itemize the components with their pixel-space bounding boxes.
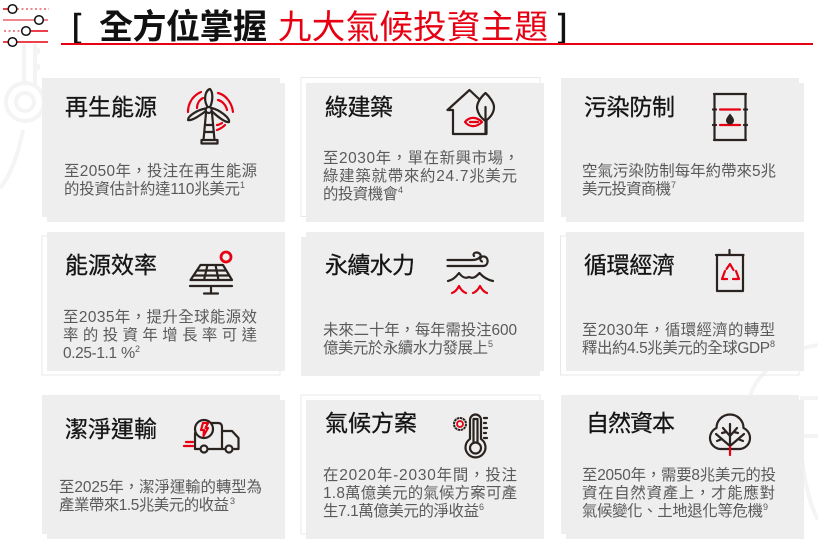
panel: 污染防制	[561, 78, 804, 222]
body text: 至2050年，需要8兆美元的投	[582, 466, 776, 484]
panel: 再生能源	[42, 78, 285, 222]
icon: tree	[710, 414, 750, 455]
icon: solar panel	[190, 252, 232, 294]
heading: 能源效率	[65, 252, 157, 278]
panel: 綠建築	[301, 78, 544, 222]
body text: 在2020年-2030年間，投注	[323, 466, 517, 484]
panel: 自然資本	[561, 395, 804, 539]
body text: 0.25-1.1	[63, 345, 117, 362]
heading: 潔淨運輸	[65, 416, 157, 442]
title: 九大氣候投資主題	[278, 10, 548, 46]
background thermometer watermark	[0, 44, 44, 188]
body text: 4	[398, 185, 403, 195]
body text	[582, 321, 775, 357]
icon: electric truck	[184, 420, 238, 452]
body text	[323, 466, 517, 520]
body text: 空氣污染防制每年約帶來5兆	[582, 162, 776, 180]
body text: 6	[479, 502, 484, 512]
body text: 3	[230, 496, 235, 506]
panel: 永續水力	[301, 232, 544, 376]
body text: 氣候變化、土地退化等危機	[582, 501, 763, 520]
background plant watermark	[750, 345, 818, 520]
body text: 1.8萬億美元的氣候方案可產	[323, 484, 517, 502]
icon: thermometer and gear	[454, 415, 487, 457]
body text	[64, 162, 257, 198]
body text: 8	[770, 339, 775, 349]
body text	[63, 308, 257, 362]
title	[61, 7, 813, 46]
title: ]	[558, 7, 567, 44]
body text: 未來二十年，每年需投注600	[323, 321, 517, 339]
body text: 至2035年，提升全球能源效	[63, 308, 257, 326]
body text: 5	[488, 339, 493, 349]
body text: 9	[763, 502, 768, 512]
body text: 至2030年，單在新興市場，	[323, 149, 519, 167]
body text	[582, 466, 776, 520]
body text: 至2030年，循環經濟的轉型	[582, 321, 775, 339]
icon: oil barrel	[713, 94, 747, 140]
title: 全方位掌握	[99, 8, 267, 46]
body text: 的投資機會	[323, 185, 398, 203]
title: [	[72, 7, 81, 44]
body text: 的投資估計約達110兆美元	[64, 180, 240, 198]
panel: 循環經濟	[560, 232, 804, 375]
body text: 7	[671, 180, 676, 190]
heading: 自然資本	[586, 410, 675, 436]
body text: 美元投資商機	[582, 180, 671, 198]
icon: house and leaves	[448, 90, 494, 134]
heading: 綠建築	[325, 94, 393, 120]
heading: 污染防制	[584, 94, 675, 120]
body text	[59, 478, 262, 514]
heading: 氣候方案	[325, 410, 417, 436]
body text	[582, 162, 776, 198]
body text: 釋出約4.5兆美元的全球GDP	[582, 339, 770, 357]
body text: 2	[135, 344, 140, 354]
icon: wind turbine	[188, 89, 233, 144]
body text: 生7.1萬億美元的淨收益	[323, 502, 479, 520]
heading: 再生能源	[65, 94, 157, 120]
icon: sliders	[3, 5, 49, 46]
body text	[323, 149, 519, 203]
icon: recycling bin	[716, 250, 744, 291]
body text: 綠建築就帶來約24.7兆美元	[323, 167, 517, 185]
body text: 至2025年，潔淨運輸的轉型為	[59, 478, 262, 496]
icon: wind and waves	[448, 253, 493, 293]
body text	[323, 321, 517, 357]
panel: 能源效率	[42, 232, 285, 375]
panel: 氣候方案	[301, 395, 544, 539]
body text: 產業帶來1.5兆美元的收益	[59, 496, 229, 514]
body text: 億美元於永續水力發展上	[323, 339, 488, 357]
body text: 1	[240, 180, 245, 190]
body text: %	[121, 345, 135, 362]
heading: 循環經濟	[584, 252, 675, 278]
body text: 率的投資年增長率可達	[63, 326, 257, 344]
body text: 資在自然資產上，才能應對	[582, 483, 775, 502]
body text: 至2050年，投注在再生能源	[64, 162, 257, 180]
heading: 永續水力	[325, 252, 415, 278]
panel: 潔淨運輸	[42, 395, 285, 539]
